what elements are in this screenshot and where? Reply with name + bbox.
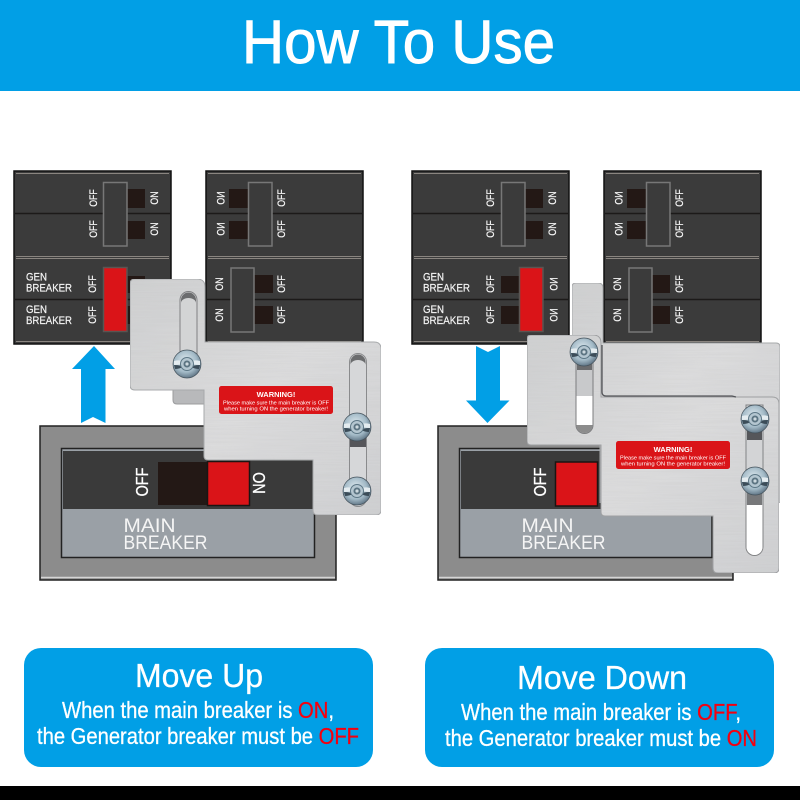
left breaker panel A: OFF	[88, 189, 100, 207]
left main breaker: BREAKER	[124, 532, 208, 554]
left breaker panel B: OFF	[276, 306, 288, 324]
icon: screw	[343, 477, 371, 505]
title: How To Use	[242, 8, 555, 76]
right breaker panel A: OFF	[485, 189, 497, 207]
warning label: Please make sure the main breaker is OFF	[223, 400, 329, 406]
left main breaker: OFF	[134, 467, 152, 496]
text: move down line 1: When the main breaker is OFF,	[461, 699, 741, 725]
left steel interlock plates	[130, 279, 381, 515]
right breaker panel A: OFF	[485, 306, 497, 324]
right breaker panel A: ON	[547, 222, 559, 236]
right breaker panel B: OFF	[674, 189, 686, 207]
right main breaker: MAIN	[522, 515, 574, 537]
arrow up	[72, 346, 115, 423]
left breaker panel B: ON	[214, 191, 226, 205]
arrow down	[466, 346, 510, 423]
left main breaker: NO	[251, 472, 269, 494]
icon: screw	[741, 405, 769, 433]
right breaker panel B: OFF	[674, 306, 686, 324]
right main breaker: OFF	[532, 467, 550, 496]
warning label: WARNING!	[257, 390, 295, 399]
right steel interlock plates	[527, 283, 780, 573]
left breaker panel A: ON	[149, 191, 161, 205]
warning label	[616, 441, 730, 469]
left breaker panel A: GEN	[26, 304, 47, 316]
upper slot	[576, 352, 593, 434]
warning label: Please make sure the main breaker is OFF	[620, 456, 726, 462]
right breaker panel B: OFF	[674, 275, 686, 293]
left breaker panel A: BREAKER	[26, 315, 72, 327]
icon: screw	[343, 413, 371, 441]
right breaker panel A: OFF	[485, 220, 497, 238]
left breaker panel B: OFF	[276, 275, 288, 293]
left breaker panel A: BREAKER	[26, 282, 72, 294]
left breaker panel B: ON	[214, 222, 226, 236]
lower slot	[746, 405, 763, 556]
left breaker panel A: OFF	[87, 275, 99, 293]
heading: move down: Move Down	[517, 659, 687, 696]
left main breaker: MAIN	[124, 515, 176, 537]
right breaker panel A: BREAKER	[423, 315, 470, 327]
warning label	[219, 386, 333, 414]
left plate slot	[180, 292, 197, 364]
right breaker panel B: ON	[612, 308, 624, 322]
panel: move down	[425, 648, 774, 767]
panel: move up	[24, 648, 373, 767]
left breaker panel B: ON	[214, 308, 226, 322]
right main breaker: BREAKER	[522, 532, 606, 554]
heading: move up: Move Up	[135, 657, 263, 694]
left breaker panel B: OFF	[276, 220, 288, 238]
left breaker panel A: OFF	[87, 306, 99, 324]
right plate slot	[350, 354, 366, 506]
right breaker panel A: ON	[547, 308, 559, 322]
right breaker panel A: GEN	[423, 272, 444, 284]
right breaker panel A	[412, 171, 569, 344]
left breaker panel A: ON	[149, 222, 161, 236]
left breaker panel B	[206, 171, 363, 344]
right breaker panel B	[604, 171, 761, 344]
bottom black strip	[0, 786, 800, 800]
left breaker panel B: ON	[214, 277, 226, 291]
left breaker panel A: GEN	[26, 272, 47, 284]
icon: screw	[173, 350, 201, 378]
right breaker panel A: GEN	[423, 304, 444, 316]
left breaker panel A: OFF	[88, 220, 100, 238]
right breaker panel A: ON	[547, 277, 559, 291]
icon: screw	[570, 338, 598, 366]
header banner	[0, 0, 800, 91]
text: move down line 2: the Generator breaker must be ON	[445, 725, 757, 751]
text: move up line 2: the Generator breaker must be OFF	[37, 723, 359, 749]
warning label: WARNING!	[654, 445, 692, 454]
right breaker panel A: OFF	[485, 275, 497, 293]
left breaker panel A	[14, 171, 171, 344]
icon: screw	[741, 467, 769, 495]
right breaker panel B: OFF	[674, 220, 686, 238]
gen breaker handle, red	[104, 268, 145, 332]
left breaker panel B: OFF	[276, 189, 288, 207]
left main breaker	[40, 426, 336, 580]
right breaker panel B: ON	[612, 277, 624, 291]
gen breaker handle, red	[501, 268, 543, 332]
text: move up line 1: When the main breaker is ON,	[62, 697, 334, 723]
right breaker panel B: ON	[612, 222, 624, 236]
warning label: when turning ON the generator breaker!	[224, 406, 328, 412]
right breaker panel B: ON	[612, 191, 624, 205]
front plate	[527, 335, 779, 573]
right breaker panel A: ON	[547, 191, 559, 205]
back plate	[572, 283, 780, 503]
right breaker panel A: BREAKER	[423, 282, 470, 294]
warning label: when turning ON the generator breaker!	[621, 462, 725, 468]
right main breaker	[438, 426, 733, 580]
